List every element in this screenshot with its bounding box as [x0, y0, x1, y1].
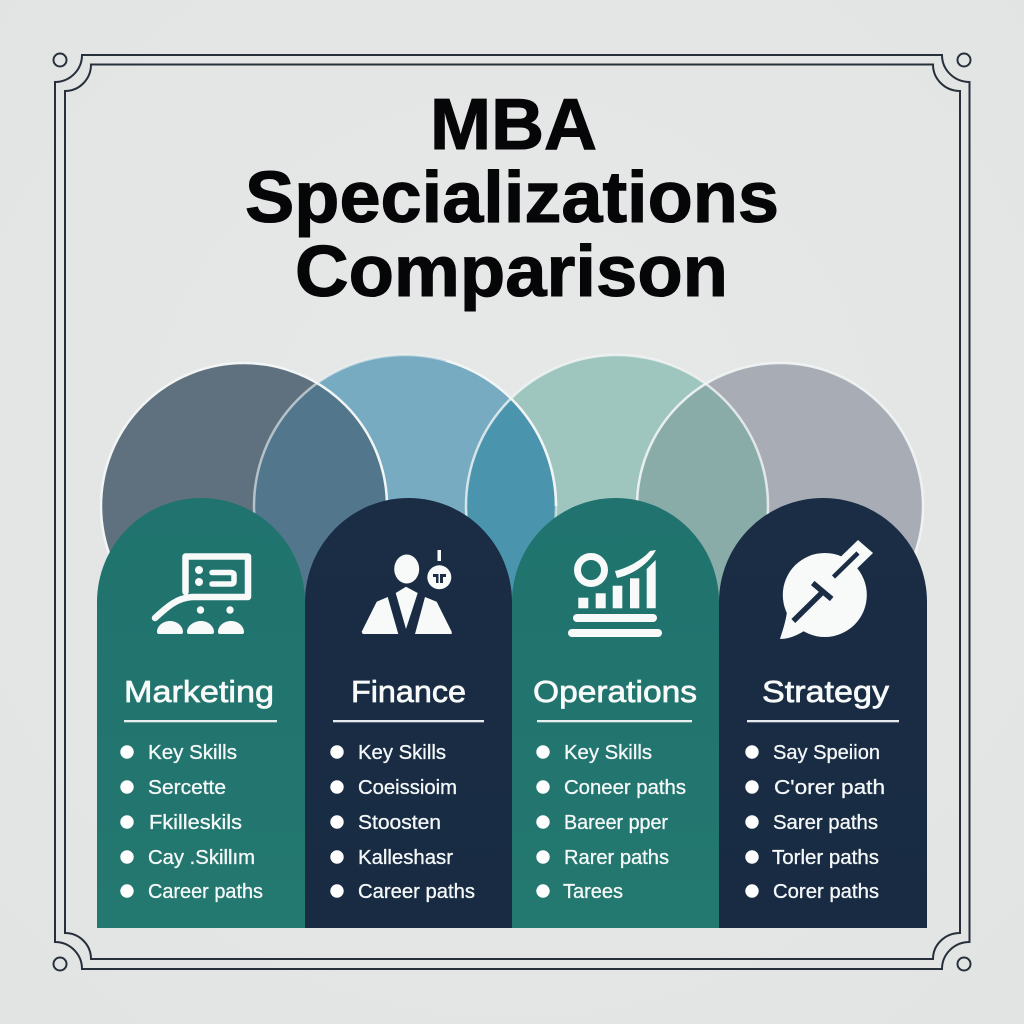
list: Marketing: Sercette	[148, 777, 226, 799]
overlapping circles	[100, 354, 924, 601]
heading: Strategy: Strategy	[762, 674, 890, 709]
panel: Marketing	[97, 498, 305, 928]
panel shape: Marketing	[97, 498, 305, 928]
title: Specializations	[245, 158, 779, 238]
list: Finance: Stoosten	[358, 812, 441, 834]
list: Operations: Tarees	[563, 881, 623, 903]
list: Marketing: Fkilleskils	[149, 812, 242, 834]
icon: strategy pin with marker	[780, 540, 873, 639]
panel shape: Strategy	[719, 498, 927, 928]
list: Operations: Bareer pper	[564, 812, 668, 834]
list: Strategy: Corer paths	[773, 881, 879, 903]
list: Strategy	[745, 742, 885, 903]
heading: Operations: Operations	[533, 674, 697, 709]
list: Marketing	[120, 742, 263, 903]
list: Marketing: Cay .Skillım	[148, 847, 255, 869]
list: Finance: Kalleshasr	[358, 847, 453, 869]
list: Finance: Key Skills	[358, 742, 446, 764]
panel shape: Finance	[305, 498, 512, 928]
icon: ring with rising bar chart	[568, 550, 662, 637]
heading: Finance: Finance	[351, 674, 466, 709]
list: Finance: Career paths	[358, 881, 475, 903]
title: MBA	[430, 85, 597, 165]
list: Finance: Coeissioim	[358, 777, 457, 799]
list: Strategy: Torler paths	[772, 847, 879, 869]
list: Strategy: Sarer paths	[773, 812, 878, 834]
list: Strategy: C'orer path	[774, 777, 885, 799]
icon: businessperson with coin	[362, 550, 452, 634]
list: Operations	[536, 742, 686, 903]
panel: Finance	[305, 498, 512, 928]
list: Operations: Coneer paths	[564, 777, 686, 799]
heading: Marketing: Marketing	[124, 674, 274, 709]
panel shape: Operations	[512, 498, 719, 928]
list: Operations: Key Skills	[564, 742, 652, 764]
list: Finance	[330, 742, 475, 903]
icon: presentation screen and audience	[155, 556, 248, 634]
panel: Operations	[512, 498, 719, 928]
list: Strategy: Say Speiion	[773, 742, 880, 764]
title: Comparison	[295, 232, 728, 312]
list: Marketing: Career paths	[148, 881, 263, 903]
list: Marketing: Key Skills	[148, 742, 237, 764]
title	[245, 85, 779, 312]
list: Operations: Rarer paths	[564, 847, 669, 869]
panel: Strategy	[719, 498, 927, 928]
